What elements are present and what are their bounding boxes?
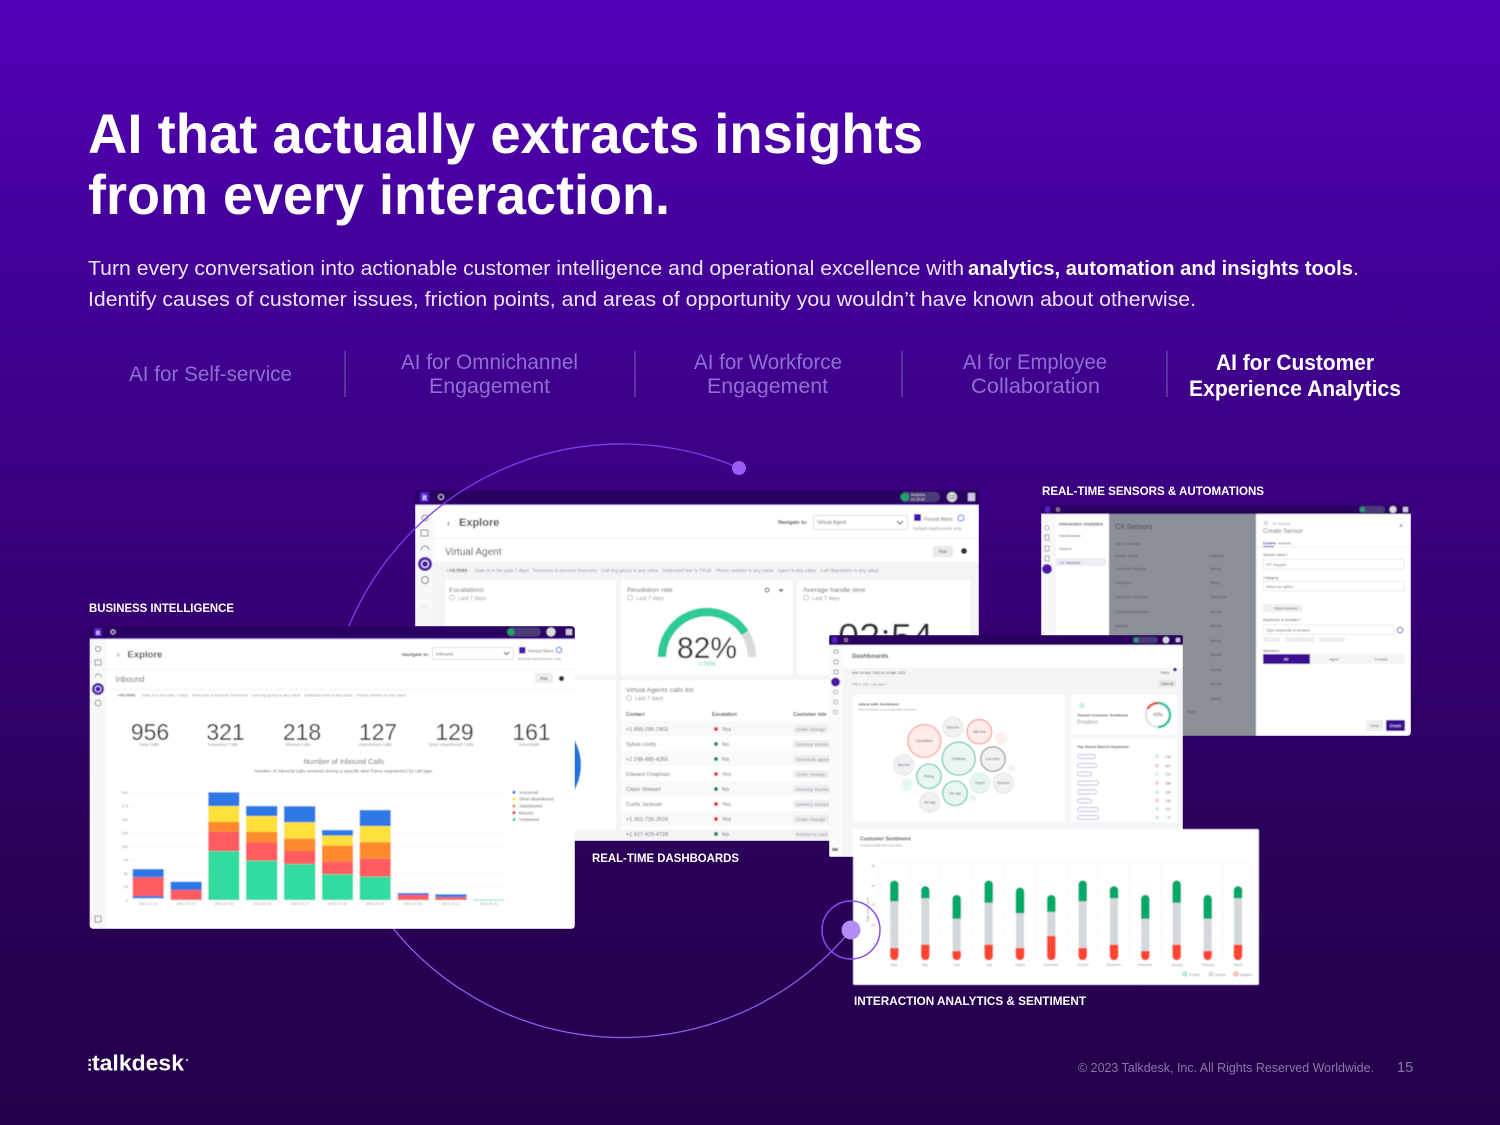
screenshot: real-time sensors: All (1284, 658, 1288, 662)
card: resolution rate gauge: >75% (699, 661, 716, 668)
bars (133, 792, 467, 898)
card: intent with sentiment bubbles: Feedback (952, 757, 966, 761)
card: virtual agents calls list: Order change (796, 772, 826, 778)
intro paragraph: analytics, automation and insights tools (968, 257, 1353, 280)
screenshot: business intelligence: Default dashboards only (518, 656, 561, 661)
screenshot: real-time sensors: Customer Discount (1115, 595, 1148, 599)
card: virtual agents calls list: Order change (796, 817, 826, 823)
card: top saved search keywords: 163 (1165, 790, 1171, 794)
legend: Answered (519, 817, 540, 822)
logo: talkdesk: talkdesk (92, 1051, 184, 1076)
card: top saved search keywords: Top Saved Search Keywords (1077, 745, 1129, 749)
tab: self-service: AI for Self-service (129, 363, 292, 386)
sentiment bars: negative (890, 936, 1242, 960)
stacked bar chart: inbound calls: 2021-07-13 (139, 902, 157, 906)
screenshot: real-time sensors: Details (1263, 540, 1277, 546)
card: top saved search keywords: 321 (1165, 764, 1171, 768)
stacked bar chart: inbound calls: 2021-07-16 (253, 902, 271, 906)
card: average handle time: Last 7 days (812, 596, 840, 602)
caption: sensors: REAL-TIME SENSORS & AUTOMATIONS (1042, 484, 1264, 498)
screenshot: virtual agent dashboard: Navigate to: (778, 520, 808, 526)
intro paragraph: Turn every conversation into actionable customer intelligence and operational excellence with (88, 257, 964, 280)
card: virtual agents calls list: Yes (722, 802, 731, 808)
screenshot: real-time sensors: Checkout keywords (1115, 610, 1148, 614)
card: virtual agents calls list: Curtis Jackson (626, 802, 662, 808)
screenshot: real-time sensors: Intents (1210, 610, 1221, 614)
card: intent with sentiment bubbles: Pricing (924, 774, 934, 778)
screenshot: dashboards: Filters Inbx Last year × (852, 682, 887, 686)
KPI row: Missed Calls (286, 742, 311, 747)
card: top saved search keywords: 77 (1167, 816, 1171, 820)
card: virtual agents calls list: Refund to card (796, 832, 828, 838)
caption: interaction analytics: INTERACTION ANALYTICS & SENTIMENT (854, 994, 1087, 1008)
card: virtual agents calls list: Delivery tracking (796, 787, 832, 793)
card: virtual agents calls list: No (722, 832, 729, 838)
stacked bar chart: inbound calls: 125 (121, 830, 129, 836)
card: virtual agents calls list: No (722, 787, 729, 793)
card: virtual agents calls list: Virtual Agents calls list (626, 687, 694, 694)
card: virtual agents calls list: Escalation (712, 712, 737, 718)
legend: Voicemail (519, 790, 538, 795)
screenshot: virtual agent dashboard: Explore (459, 517, 499, 529)
stacked bar chart: inbound calls: 2021-07-21 (442, 902, 460, 906)
screenshot: real-time sensors (1041, 505, 1411, 736)
card: escalations: Last 7 days (458, 596, 486, 602)
stacked bar chart: inbound calls: 2021-07-20 (404, 902, 422, 906)
tab: customer experience analytics (active) (1189, 350, 1401, 401)
KPI row: Voicemails (518, 742, 540, 747)
card: top saved search keywords: 230 (1165, 755, 1171, 759)
card: intent with sentiment bubbles: Way text (898, 763, 910, 767)
KPI row: 161 (512, 719, 551, 745)
card: average handle time: Average handle time (803, 587, 865, 594)
screenshot: virtual agent dashboard: it (422, 495, 427, 502)
screenshot: virtual agent dashboard: CD (948, 495, 956, 501)
tab: workforce (694, 351, 842, 398)
card: overall customer sentiment: Positive (1077, 720, 1099, 726)
screenshot: real-time sensors: Intents (1210, 682, 1221, 686)
screenshot: virtual agent dashboard (415, 490, 979, 841)
legend (512, 790, 554, 822)
KPI row: 956 (131, 719, 169, 745)
screenshot: virtual agent dashboard: ‹ (447, 518, 450, 528)
tab: employee collaboration (963, 351, 1107, 398)
stacked bar chart: inbound calls: 175 (121, 804, 129, 808)
sentiment bars: positive (890, 880, 1242, 919)
sentiment bars: neutral (890, 898, 1242, 952)
screenshot: business intelligence: Explore (128, 650, 162, 660)
sentiment legend: Negative (1240, 973, 1253, 977)
intro paragraph: Identify causes of customer issues, friction points, and areas of opportunity you wouldn’t have known about otherwise. (88, 288, 1196, 311)
panel: customer sentiment chart: November (1138, 963, 1153, 967)
panel: customer sentiment chart: January (1171, 963, 1183, 967)
KPI row: 321 (206, 719, 245, 745)
screenshot: real-time sensors: Contact (1374, 658, 1388, 662)
screenshot: real-time sensors: Intents (1210, 639, 1221, 643)
screenshot: business intelligence: Run (540, 676, 549, 681)
card: virtual agents calls list: Last 7 days (635, 696, 663, 702)
screenshot: virtual agent dashboard: Available (911, 493, 925, 497)
screenshot: dashboards: Filters (1160, 671, 1170, 675)
panel: customer sentiment chart: October (1077, 963, 1090, 967)
card: virtual agents calls list: Contact (626, 712, 645, 718)
screenshot: real-time sensors: Customer Support (1115, 567, 1147, 571)
panel: customer sentiment chart: June (954, 963, 961, 967)
sentiment legend: Neutral (1215, 973, 1226, 977)
card: virtual agents calls list: Customer inte (793, 712, 827, 718)
screenshot: real-time sensors: × (1399, 523, 1403, 530)
screenshot: virtual agent dashboard: Persist filters (924, 517, 953, 523)
stacked bar chart: inbound calls: 2021-07-15 (215, 902, 233, 906)
screenshot: dashboards: Dashboards (852, 653, 889, 660)
card: escalations: Escalations (449, 587, 484, 594)
tab: workforce: AI for Workforce (694, 351, 842, 374)
screenshot: real-time sensors: Category (1263, 576, 1279, 580)
card: virtual agents calls list: +1 917-429-4728 (626, 832, 668, 838)
caption: dashboards: REAL-TIME DASHBOARDS (592, 851, 739, 865)
screenshot: business intelligence: it (96, 631, 100, 637)
panel: customer sentiment chart: November (1044, 963, 1059, 967)
panel: customer sentiment chart: August (1015, 963, 1025, 967)
screenshot: business intelligence: Inbound (436, 652, 454, 658)
title: AI that actually extracts insights (88, 102, 923, 165)
screenshot: real-time sensors: Intents (1210, 624, 1221, 628)
tab navigation (129, 350, 1401, 401)
panel: customer sentiment chart: 10 (871, 923, 875, 927)
screenshot: real-time sensors: Billing (1210, 581, 1220, 585)
panel: customer sentiment chart: April (891, 963, 897, 967)
screenshot: virtual agent dashboard: Virtual Agent (445, 547, 502, 558)
screenshot: business intelligence: Navigate to: (402, 652, 430, 658)
screenshot: business intelligence: Persist filters (528, 648, 555, 654)
screenshot: virtual agent dashboard: Date is in the past 7 days Timezone is account timezone Call ring group is any value Dedicated line is TRUE Phone number is any value Agent is any value Call disposition is any value (475, 568, 880, 573)
tab: omnichannel (401, 351, 578, 398)
panel: customer sentiment chart: May (922, 963, 928, 967)
arc end dot: upper (732, 461, 746, 475)
stacked bar chart: inbound calls: 75 (124, 858, 129, 862)
screenshot: real-time sensors: Intents (1210, 567, 1221, 571)
card: virtual agents calls list: Order change (796, 727, 826, 733)
tab: customer experience analytics (active): Experience Analytics (1189, 376, 1401, 401)
card: virtual agents calls list: Yes (722, 817, 731, 823)
title (88, 102, 923, 226)
screenshot: real-time sensors: Dashboards (1059, 533, 1081, 538)
card: average handle time: 02:54 (838, 617, 933, 659)
card: virtual agents calls list: Delivery tracking (796, 802, 832, 808)
card: top saved search keywords: 130 (1165, 799, 1171, 803)
legend: Short abandoned (519, 797, 554, 802)
KPI row: 127 (359, 719, 397, 745)
screenshot: real-time sensors: Intents (1210, 653, 1221, 657)
card: resolution rate gauge: 82% (677, 632, 737, 665)
card: escalations (445, 580, 616, 675)
stacked bar chart: inbound calls: 2021-07-17 (291, 902, 309, 906)
screenshot: business intelligence: ‹ (117, 650, 120, 659)
stacked bar chart: inbound calls: 50 (124, 871, 129, 876)
panel: customer sentiment chart: Contact sentiment over time (860, 844, 902, 848)
panel: customer sentiment chart: Total interactions (866, 897, 870, 922)
screenshot: real-time sensors: Intents (1210, 697, 1221, 701)
stacked bar chart: inbound calls: 200 (121, 790, 129, 795)
panel: customer sentiment chart: March (1234, 963, 1243, 967)
screenshot: dashboards (829, 635, 1183, 857)
panel: customer sentiment chart: July (986, 963, 992, 967)
tab: workforce: Engagement (707, 375, 828, 398)
screenshot: real-time sensors: CX Sensors (1115, 524, 1153, 531)
screenshot: real-time sensors: P/F Support (1266, 563, 1287, 567)
screenshot: real-time sensors: Category (1209, 554, 1225, 558)
decorative arc: upper (345, 444, 739, 636)
stacked bar chart: inbound calls: 100 (121, 844, 129, 849)
screenshot: real-time sensors: CX Sensors (1059, 560, 1080, 565)
KPI row: Answered Calls (208, 742, 239, 747)
card: top saved search keywords: 214 (1165, 772, 1171, 776)
card: top saved search keywords: 117 (1165, 808, 1171, 812)
stacked bar chart: inbound calls: 2021-07-22 (480, 902, 498, 906)
screenshot: virtual agent dashboard: 01:25:43 (911, 498, 925, 502)
sentiment legend (1183, 972, 1253, 977)
screenshot: virtual agent dashboard: › FILTERS (447, 568, 467, 573)
tab: employee collaboration: AI for Employee (963, 351, 1107, 374)
screenshot: real-time sensors: CX Sensors (1272, 522, 1291, 526)
card: intent with sentiment bubbles (853, 695, 1065, 822)
screenshot: real-time sensors: Type keywords or phrases (1266, 628, 1310, 632)
card: virtual agents calls list: No (722, 757, 729, 763)
card: intent with sentiment bubbles: Low comp. (985, 757, 1001, 761)
card: resolution rate gauge: Resolution rate (627, 587, 673, 594)
card: virtual agents calls list: +1 660-299-7903 (626, 727, 668, 733)
intro paragraph (88, 257, 1359, 311)
sentiment legend: Positive (1189, 973, 1200, 977)
screenshot: business intelligence: Date is in the past 7 days Timezone is Account Timezone Call ring group is any value Dedicated line is any value Phone number is any value (142, 692, 406, 698)
card: virtual agents calls list: +1 361-726-2539 (626, 817, 668, 823)
legend: Abandoned (519, 804, 543, 809)
panel: customer sentiment chart: Customer Sentiment (860, 836, 911, 842)
arc end marker: ring and dot (822, 901, 880, 959)
screenshot: real-time sensors: Import phrases (1274, 606, 1298, 610)
card: virtual agents calls list: Delivery tracking (796, 742, 832, 748)
stacked bar chart: inbound calls: 150 (121, 817, 129, 822)
stacked bar chart: inbound calls (121, 757, 554, 906)
screenshot: real-time sensors: Keywords or phrases * (1263, 618, 1302, 622)
stacked bar chart: inbound calls: 2021-07-14 (177, 902, 195, 906)
card: intent with sentiment bubbles: Expert (975, 781, 985, 785)
screenshot: real-time sensors: Sensor name * (1263, 553, 1289, 557)
card: average handle time (797, 580, 970, 675)
panel: customer sentiment chart: 15 (871, 903, 875, 907)
screenshot: real-time sensors: Search (1059, 546, 1072, 551)
screenshot: business intelligence: Inbound (116, 675, 144, 684)
page number: 15 (1397, 1060, 1413, 1076)
card: virtual agents calls list: Sylvia Lively (626, 742, 657, 748)
card: intent with sentiment bubbles: Intent with Sentiment (858, 702, 900, 706)
tab: omnichannel: AI for Omnichannel (401, 351, 578, 374)
card: overall customer sentiment: Overall Customer Sentiment (1077, 714, 1129, 718)
screenshot: real-time sensors: Website (1115, 624, 1129, 628)
screenshot: real-time sensors: Interaction Analytics (1059, 522, 1104, 526)
KPI row (131, 723, 550, 746)
card: resolution rate gauge (621, 580, 793, 675)
KPI row: 218 (283, 719, 321, 745)
card: top saved search keywords (1071, 738, 1177, 822)
card: intent with sentiment bubbles: Wait time (973, 730, 986, 734)
screenshot: dashboards: from 24 Mar, 2021 to 24 Mar, 2022 (852, 671, 906, 675)
screenshot: real-time sensors: Sensor name (1115, 554, 1138, 558)
card: intent with sentiment bubbles: One app (949, 792, 961, 796)
screenshot: real-time sensors: Actions (1278, 540, 1291, 546)
KPI row: 129 (435, 719, 474, 745)
card: virtual agents calls list: Yes (722, 727, 731, 733)
panel: customer sentiment chart: 25 (871, 864, 875, 868)
screenshot: real-time sensors: Next › (1187, 710, 1198, 714)
panel: customer sentiment chart (853, 829, 1259, 985)
caption: business intelligence: BUSINESS INTELLIGENCE (89, 601, 234, 615)
screenshot: real-time sensors: Select an option (1266, 585, 1293, 589)
screenshot: real-time sensors: Checkout (1115, 581, 1132, 585)
card: resolution rate gauge: Last 7 days (636, 596, 664, 602)
stacked bar chart: inbound calls: 2021-07-18 (328, 902, 347, 906)
tab: omnichannel: Engagement (429, 375, 550, 398)
card: overall customer sentiment: 49% (1153, 712, 1164, 718)
panel: customer sentiment chart: February (1202, 963, 1215, 967)
card: virtual agents calls list: No (722, 742, 729, 748)
screenshot: business intelligence: › FILTERS (117, 692, 136, 698)
screenshot: business intelligence (90, 626, 575, 929)
card: intent with sentiment bubbles: Discount (997, 781, 1010, 785)
stacked bar chart: inbound calls: 25 (124, 884, 129, 889)
card: virtual agents calls list: +1 248-485-4265 (626, 757, 668, 763)
tab: employee collaboration: Collaboration (971, 375, 1100, 398)
card: virtual agents calls list: Schedule appoint (796, 757, 834, 763)
screenshot: virtual agent dashboard: Run (939, 549, 948, 554)
screenshot: real-time sensors: Create Sensor (1263, 528, 1303, 535)
card: virtual agents calls list (622, 680, 830, 837)
card: intent with sentiment bubbles: Use app (924, 800, 936, 804)
card: intent with sentiment bubbles: Discount (947, 726, 959, 730)
screenshot: real-time sensors: Channels (1210, 595, 1226, 599)
card: intent with sentiment bubbles: Cancellation (916, 739, 933, 743)
tab: customer experience analytics (active): AI for Customer (1216, 350, 1374, 375)
screenshot: virtual agent dashboard: Default dashboards only (913, 526, 962, 531)
decorative arc: lower (378, 908, 851, 1038)
card: intent with sentiment bubbles: Most for intents in your calls with sentiment (858, 708, 916, 712)
screenshot: real-time sensors: Speakers (1263, 649, 1279, 653)
stacked bar chart: inbound calls: Number of Inbound Calls (304, 757, 385, 766)
copyright: © 2023 Talkdesk, Inc. All Rights Reserved Worldwide. (1078, 1061, 1374, 1075)
KPI row: Short Abandoned Calls (429, 742, 474, 747)
screenshot: real-time sensors: Clear (1370, 724, 1380, 728)
KPI row: Abandoned Calls (358, 742, 393, 747)
card: donut chart (574, 680, 616, 830)
stacked bar chart: inbound calls: 2021-07-19 (366, 902, 384, 906)
legend: Missed (519, 810, 534, 815)
card: virtual agents calls list: Edward Chapman (626, 772, 670, 778)
screenshot: real-time sensors: Create (1390, 724, 1401, 728)
card: overall customer sentiment (1071, 695, 1177, 735)
panel: customer sentiment chart: December (1107, 963, 1122, 967)
title: from every interaction. (88, 163, 670, 226)
screenshot: virtual agent dashboard: Virtual Agent (817, 520, 847, 526)
card: virtual agents calls list: Claire Stewart (626, 787, 661, 793)
screenshot: real-time sensors: 16 CX Sensors (1115, 542, 1141, 546)
stacked bar chart: inbound calls: Number of inbound calls received during a specific time frame segmented by call type. (255, 768, 433, 774)
KPI row: Total Calls (139, 742, 160, 747)
panel: customer sentiment chart: 20 (871, 884, 875, 888)
card: top saved search keywords: 289 (1165, 782, 1171, 786)
intro paragraph: . (1353, 257, 1359, 280)
stacked bar chart: inbound calls: 0 (126, 898, 129, 903)
panel: customer sentiment chart: 5 (873, 942, 875, 946)
screenshot: real-time sensors: Intents (1210, 668, 1221, 672)
screenshot: dashboards: Clear all (1161, 682, 1173, 686)
screenshot: real-time sensors: Agent (1329, 658, 1340, 662)
card: virtual agents calls list: Yes (722, 772, 731, 778)
